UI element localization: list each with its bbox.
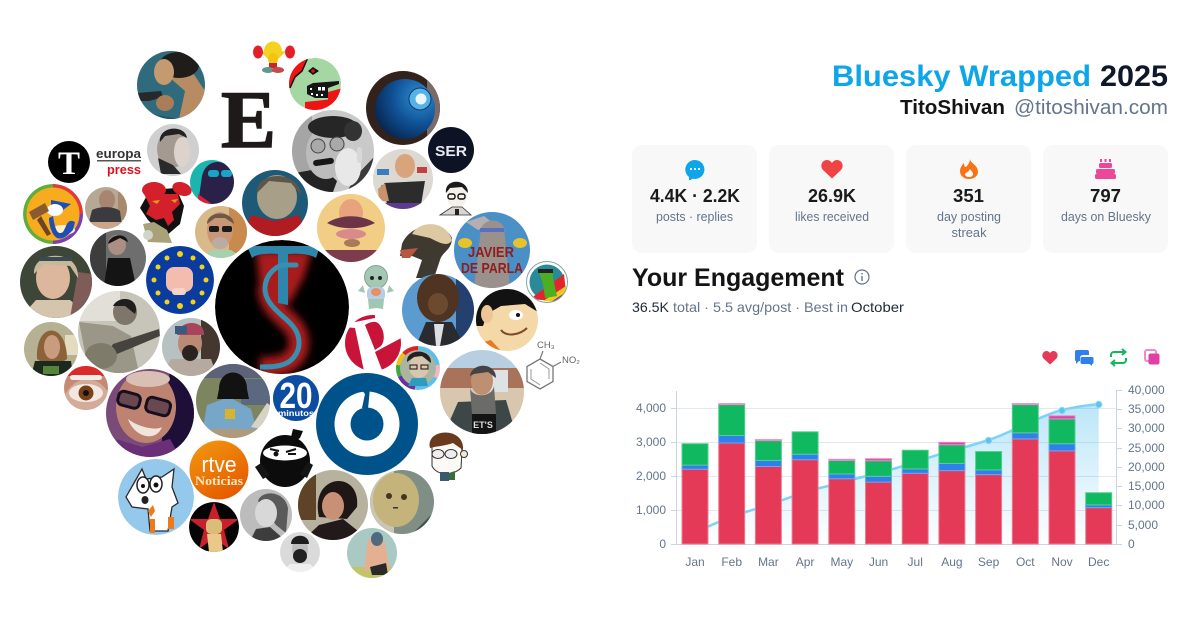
avatar: New York Times logo [48, 141, 90, 183]
right axis labels: 25,000 [1128, 441, 1165, 455]
bar: October [1012, 404, 1038, 544]
avatar: comic man with dark hair [476, 289, 538, 351]
month labels: May [830, 555, 853, 569]
icon: info [855, 270, 869, 284]
panel: posts and replies stat [632, 145, 757, 253]
icon: repost [1111, 349, 1126, 366]
bar: May [829, 459, 855, 544]
month labels: Aug [941, 555, 963, 569]
panel: likes received stat: likes received [795, 209, 869, 224]
right axis labels: 40,000 [1128, 383, 1165, 397]
month labels [685, 555, 1109, 569]
avatar: Javier de Parla poster [454, 212, 530, 288]
panel: days on Bluesky stat [1043, 145, 1168, 253]
avatar: Groucho Marx [292, 110, 374, 192]
heading: your engagement: Your Engagement [632, 264, 845, 292]
avatar: Javier de Parla poster: DE PARLA [461, 260, 523, 277]
month labels: Dec [1088, 555, 1109, 569]
avatar: europa press logo: press [107, 162, 141, 177]
stacked bars [682, 404, 1112, 544]
avatar: hammer logo [23, 184, 83, 244]
avatar: RTVE Noticias logo [190, 440, 248, 500]
avatar: Público P logo [345, 315, 401, 370]
avatar: Darth Vader with laptop [196, 364, 270, 438]
avatar: New York Times logo: T [58, 146, 80, 182]
right axis labels: 35,000 [1128, 402, 1165, 416]
panel: posts and replies stat: 4.4K · 2.2K [650, 186, 740, 206]
avatar: El Español E logo [203, 74, 295, 166]
icon: reply [1075, 350, 1094, 366]
avatar: painted child [242, 170, 308, 236]
avatar: woman black and white [240, 489, 292, 541]
month labels: Feb [721, 555, 742, 569]
avatar: blue sphere in tunnel [366, 71, 440, 145]
right axis labels: 30,000 [1128, 421, 1165, 435]
avatar: rainbow ring cartoon man [396, 346, 440, 390]
legend icons [1042, 349, 1160, 366]
icon: quote [1145, 350, 1160, 364]
right axis labels: 0 [1128, 537, 1135, 551]
engagement summary: 36.5K [632, 299, 670, 315]
month labels: Sep [978, 555, 1000, 569]
avatar: man with cap and beard [162, 318, 220, 376]
bar: April [792, 432, 818, 544]
month labels: Jan [685, 555, 705, 569]
icon: cake [1095, 159, 1116, 179]
left axis labels [636, 401, 666, 551]
avatar: EU flag with fist [146, 246, 214, 314]
month labels: Jun [869, 555, 888, 569]
panel: posting streak stat: day posting [937, 209, 1001, 224]
month labels: Oct [1016, 555, 1035, 569]
month labels: Nov [1051, 555, 1073, 569]
avatar: woman in black blazer [90, 230, 146, 286]
avatar: rainbow ring green dinosaur [526, 262, 568, 302]
left axis labels: 4,000 [636, 401, 666, 415]
left axis labels: 0 [659, 537, 666, 551]
avatar: SER logo [428, 127, 474, 173]
left axis labels: 3,000 [636, 435, 666, 449]
icon: heart [821, 160, 843, 178]
avatar: red star with fist [189, 502, 239, 552]
panel: posting streak stat [906, 145, 1031, 253]
bar: July [902, 450, 928, 544]
panel: posting streak stat: 351 [953, 186, 984, 206]
right axis labels: 20,000 [1128, 460, 1165, 474]
avatar: raptor with wool hat [400, 224, 452, 278]
icon: like [1042, 351, 1058, 364]
left axis labels: 2,000 [636, 469, 666, 483]
avatar: egg head [370, 470, 434, 534]
title: Bluesky Wrapped [832, 60, 1091, 93]
bar: June [866, 459, 892, 544]
month labels: Apr [796, 555, 814, 569]
right axis labels [1128, 383, 1165, 551]
avatar: mustache closeup [317, 194, 385, 262]
avatar: line drawing of man in glasses [440, 182, 471, 215]
bar: December [1086, 493, 1112, 544]
right axis labels: 15,000 [1128, 479, 1165, 493]
panel: posting streak stat: streak [952, 225, 987, 240]
avatar: RTVE Noticias logo: Noticias [195, 473, 243, 488]
cumulative area and line [695, 401, 1102, 544]
avatar: Cthulhu mascot [358, 266, 394, 309]
avatar: navy ring logo [316, 373, 418, 475]
panel: avatar bubble cluster [20, 42, 580, 578]
avatar: Javier de Parla poster: JAVIER [468, 244, 514, 261]
avatar: yellow bird with boxing gloves [253, 42, 295, 73]
right axis labels: 10,000 [1128, 498, 1165, 512]
avatar: blonde on telephone [347, 528, 397, 578]
avatar: Hellboy [140, 179, 194, 243]
avatar: o-Nitrotoluene chemical formula [527, 340, 580, 389]
avatar: 20 minutos logo: minutos [278, 408, 314, 418]
avatar: 20 minutos logo: 20 [280, 375, 312, 416]
icon: flame [960, 159, 978, 179]
account name and handle: TitoShivan [900, 97, 1005, 119]
avatar: man with long hair [24, 322, 78, 376]
avatar: man at table with laptop [85, 187, 127, 230]
right axis labels: 5,000 [1128, 518, 1158, 532]
avatar: man with sunglasses [195, 206, 247, 258]
avatar: bearded man sketch [280, 532, 320, 572]
bar: September [976, 452, 1002, 544]
month labels: Mar [758, 555, 779, 569]
avatar: El Español E logo: E [221, 74, 276, 165]
avatar: woman with guitar [78, 291, 160, 373]
left axis labels: 1,000 [636, 503, 666, 517]
avatar: bear man in shirt [402, 274, 474, 346]
bar: February [719, 404, 745, 544]
engagement summary [632, 299, 904, 315]
avatar: smiling man with glasses [106, 369, 194, 457]
panel: likes received stat [769, 145, 894, 253]
panel: days on Bluesky stat: days on Bluesky [1061, 209, 1151, 224]
engagement summary: total · 5.5 avg/post · Best in [673, 299, 848, 315]
panel: posts and replies stat: posts · replies [656, 209, 733, 224]
avatar: pixel dinosaur [289, 58, 341, 110]
avatar: man with long beard: ET'S [473, 420, 493, 430]
panel: days on Bluesky stat: 797 [1090, 186, 1121, 206]
avatar: RTVE Noticias logo: rtve [202, 452, 236, 477]
avatar: SER logo: SER [435, 143, 467, 160]
account name and handle: @titoshivan.com [1014, 97, 1168, 119]
avatar: europa press logo [96, 146, 142, 177]
engagement summary: October [851, 299, 904, 315]
avatar: o-Nitrotoluene chemical formula: NO₂ [562, 355, 580, 366]
avatar: Jane Austen portrait [20, 246, 92, 318]
bar: January [682, 444, 708, 544]
avatar: teal Vader cartoon [190, 160, 234, 204]
avatar: TS monogram, main user [215, 240, 349, 374]
avatar: europa press logo: europa [96, 146, 142, 161]
month labels: Jul [908, 555, 923, 569]
avatar: white cartoon chicken [118, 459, 194, 535]
chart: monthly engagement stacked bars with cumulative line [636, 383, 1165, 569]
avatar: dark haired woman [298, 470, 368, 540]
avatar: man covering half of face [147, 124, 199, 176]
title: 2025 [1100, 60, 1168, 93]
account name and handle [900, 97, 1168, 119]
avatar: man with black t-shirt [373, 149, 433, 209]
bar: March [755, 440, 781, 544]
avatar: ninja icon [255, 429, 313, 487]
avatar: eye with Santa hat [64, 365, 108, 410]
avatar: painted woman with pistol [137, 51, 205, 119]
icon: chat bubble [685, 160, 704, 180]
bar: November [1049, 416, 1075, 544]
panel: likes received stat: 26.9K [808, 186, 856, 206]
bar: August [939, 442, 965, 544]
avatar: man with long beard [440, 350, 524, 434]
avatar: o-Nitrotoluene chemical formula: CH₃ [537, 340, 555, 351]
avatar: cartoon man with glasses [430, 432, 468, 481]
